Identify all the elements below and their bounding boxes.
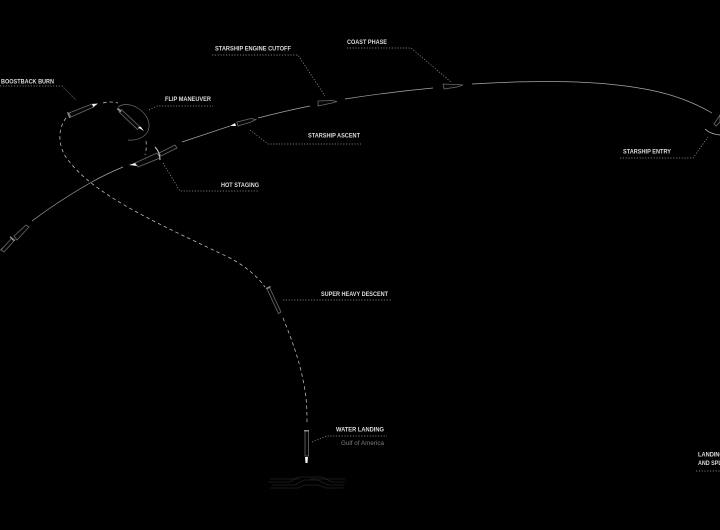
label: flip maneuver — [149, 96, 213, 110]
label: super heavy descent — [283, 291, 391, 300]
label: landing and splashdown — [696, 452, 720, 471]
ocean surface graphic — [268, 477, 345, 488]
rocket: starship engine cutoff — [318, 100, 337, 106]
rocket: super heavy descent — [266, 286, 281, 314]
label: water landing — [312, 426, 387, 447]
label: starship entry — [620, 137, 708, 158]
label: hot staging — [163, 163, 259, 191]
label: boostback burn — [0, 78, 76, 100]
label: starship ascent — [250, 130, 361, 144]
rocket: liftoff stack — [1, 225, 29, 252]
label: starship entry: STARSHIP ENTRY — [623, 148, 672, 156]
label: water landing: WATER LANDING — [336, 426, 384, 434]
label: hot staging: HOT STAGING — [221, 182, 259, 189]
label: coast phase — [347, 39, 451, 82]
label: flip maneuver: FLIP MANEUVER — [165, 96, 211, 103]
rocket: hot staging — [129, 145, 177, 167]
rocket: boostback burn — [67, 104, 98, 118]
rocket: coast phase — [443, 84, 463, 89]
label: starship ascent: STARSHIP ASCENT — [308, 132, 360, 140]
label: super heavy descent: SUPER HEAVY DESCENT — [321, 291, 388, 298]
label: water landing: Gulf of America — [341, 440, 384, 447]
label: starship engine cutoff — [212, 46, 325, 96]
super heavy return trajectory — [60, 102, 307, 425]
flip maneuver arc — [118, 105, 149, 140]
rocket: starship entry — [705, 115, 720, 135]
rocket: water landing — [304, 430, 309, 463]
label: boostback burn: BOOSTBACK BURN — [1, 78, 54, 86]
rocket: flip maneuver — [117, 105, 149, 140]
label: starship engine cutoff: STARSHIP ENGINE CUTOFF — [215, 46, 291, 52]
label: coast phase: COAST PHASE — [347, 39, 388, 46]
rocket: starship ascent — [230, 118, 256, 126]
starship trajectory line — [0, 82, 712, 250]
